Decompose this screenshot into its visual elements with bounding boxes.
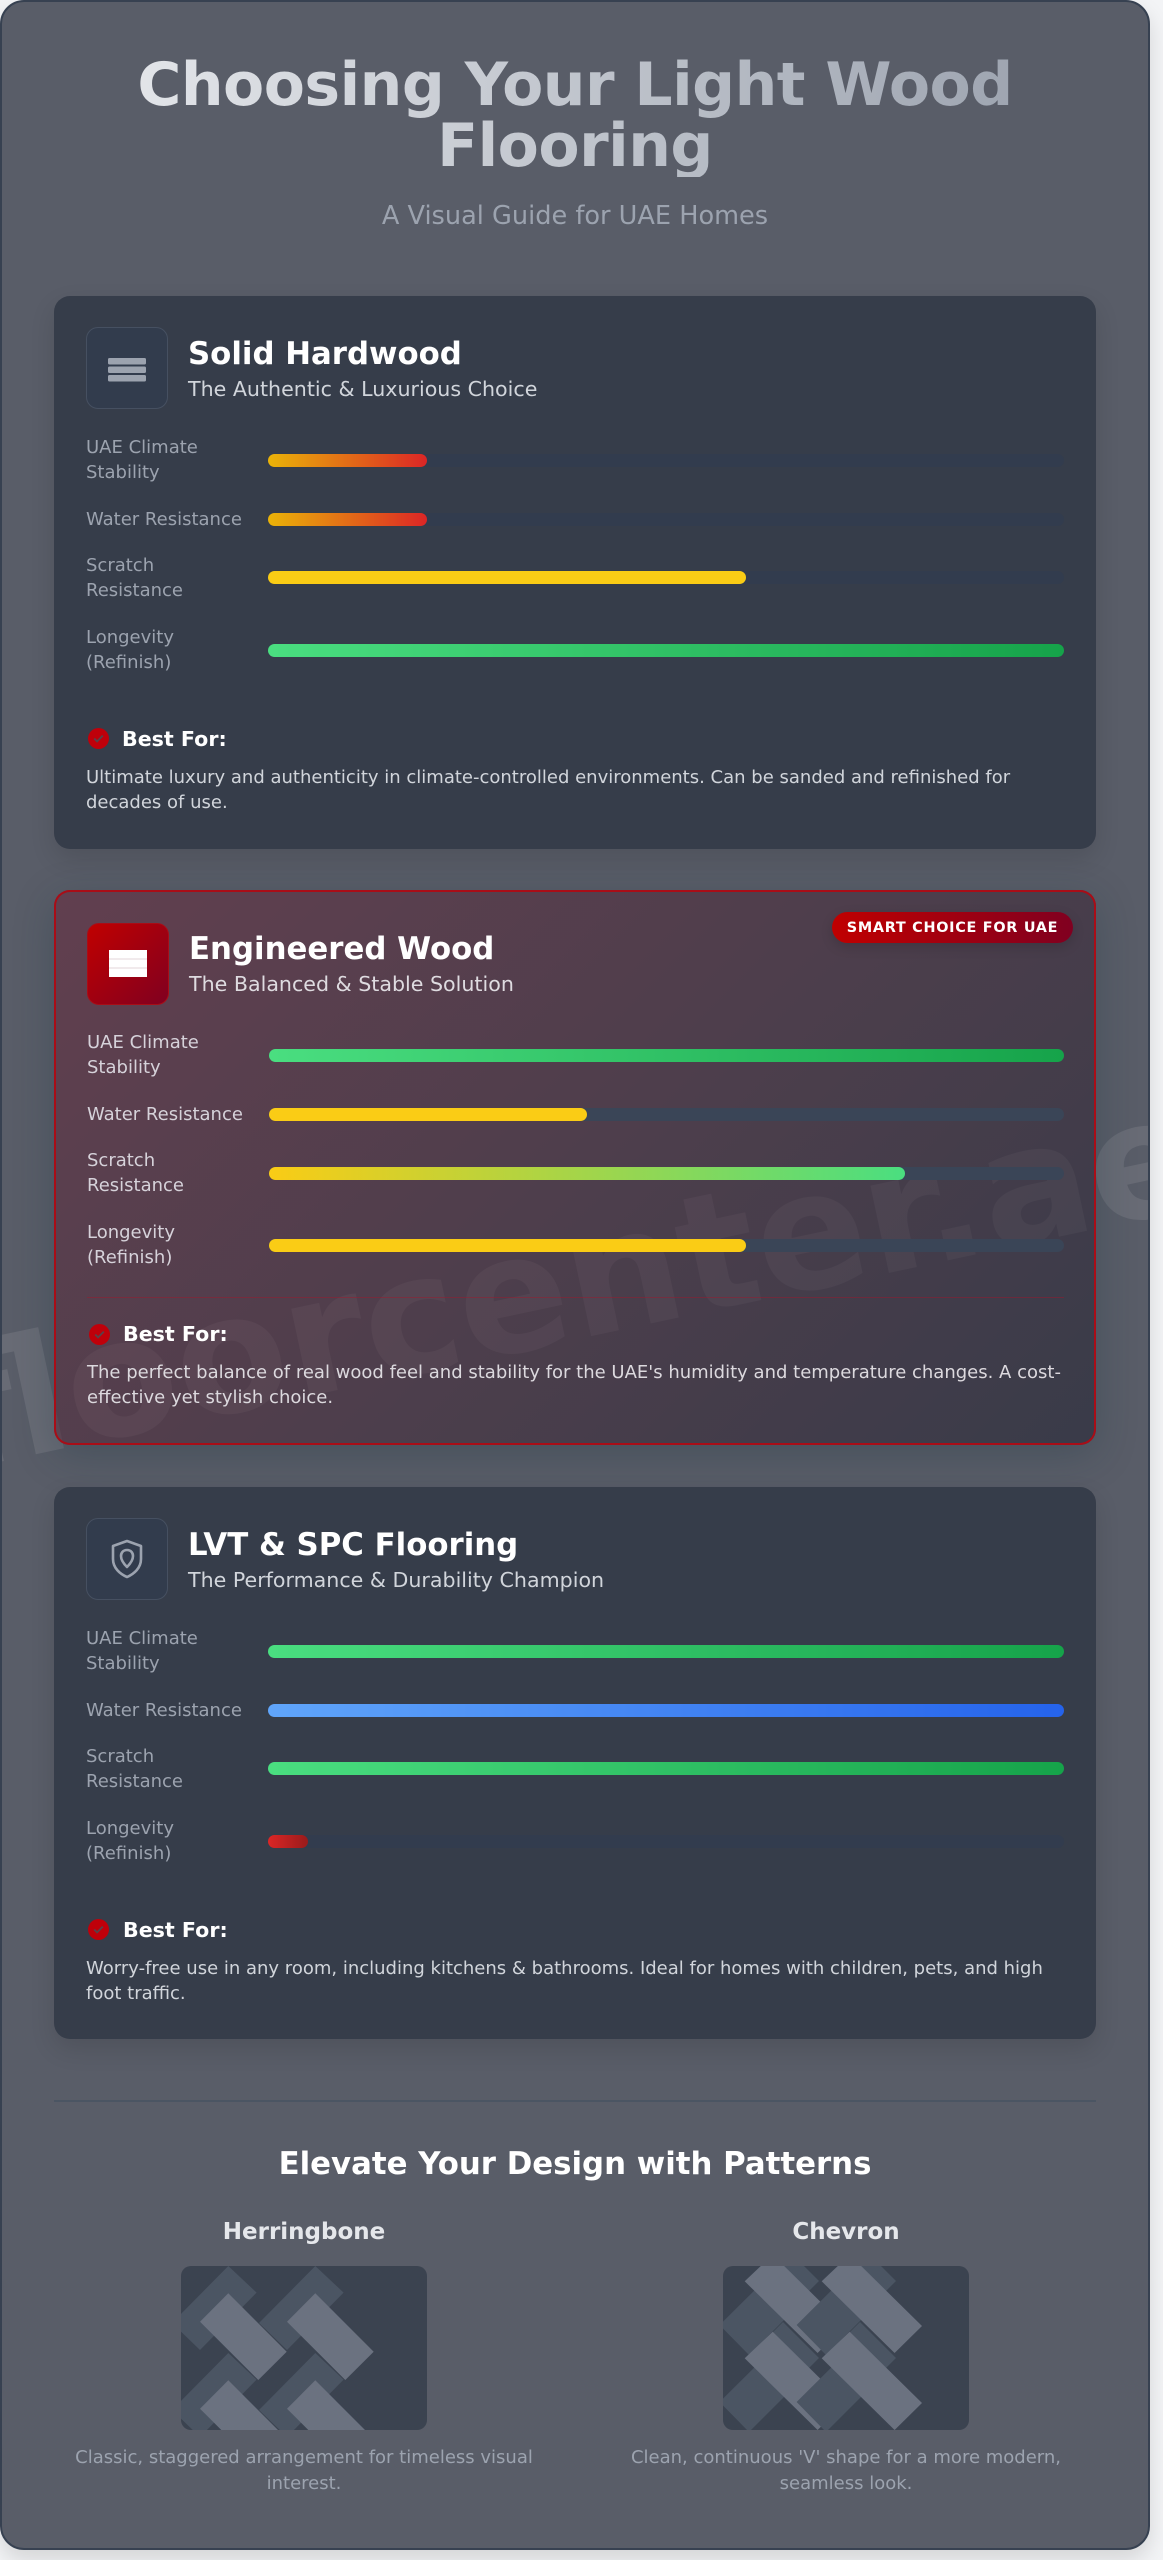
- rating: longevity: Longevity (Refinish): [86, 627, 174, 673]
- chevron swatch: [723, 2266, 969, 2430]
- rating: water resistance: Water Resistance: [87, 1104, 243, 1125]
- best for text: Ultimate luxury and authenticity in climate-controlled environments. Can be sanded and refinished for decades of use.: [86, 767, 1010, 813]
- icon: shield: [86, 1518, 168, 1600]
- rating: water resistance: Water Resistance: [86, 509, 242, 530]
- herringbone heading: Herringbone: [223, 2219, 385, 2245]
- tagline: The Balanced & Stable Solution: [189, 972, 514, 996]
- rating: longevity: [87, 1222, 1064, 1268]
- best for text: The perfect balance of real wood feel and stability for the UAE's humidity and temperature changes. A cost-effective yet stylish choice.: [87, 1362, 1061, 1408]
- pattern: chevron: [631, 2219, 1061, 2494]
- rating: longevity: [86, 1818, 308, 1864]
- herringbone caption: Classic, staggered arrangement for timeless visual interest.: [75, 2447, 533, 2494]
- best for heading: Best For:: [123, 1918, 228, 1942]
- panel: engineered wood: [54, 890, 1096, 1445]
- icon: stacked planks: [86, 327, 168, 409]
- tagline: The Performance & Durability Champion: [188, 1568, 604, 1592]
- rating: water resistance: [86, 1700, 1064, 1721]
- rating: water resistance: [87, 1104, 1064, 1125]
- tagline: The Authentic & Luxurious Choice: [188, 376, 537, 400]
- badge: [832, 912, 1073, 943]
- best for text: Worry-free use in any room, including kitchens & bathrooms. Ideal for homes with children, pets, and high foot traffic.: [86, 1958, 1043, 2004]
- rating: scratch resistance: [87, 1150, 1064, 1196]
- divider: [87, 1297, 1064, 1298]
- rating: longevity: [86, 627, 1064, 673]
- rating: scratch resistance: [86, 555, 746, 601]
- rating: UAE climate stability: [86, 437, 427, 483]
- chevron heading: Chevron: [792, 2219, 900, 2245]
- rating: UAE climate stability: [86, 1628, 1064, 1674]
- rating: longevity: Longevity (Refinish): [87, 1222, 175, 1268]
- panel: LVT and SPC: [54, 1487, 1096, 2039]
- rating: UAE climate stability: UAE Climate Stability: [86, 437, 198, 483]
- subtitle: A Visual Guide for UAE Homes: [382, 201, 768, 231]
- icon: check badge: [88, 1919, 109, 1940]
- rating: UAE climate stability: UAE Climate Stability: [87, 1032, 199, 1078]
- herringbone swatch: [181, 2266, 427, 2430]
- title: Choosing Your Light Wood Flooring: [137, 50, 1013, 181]
- rating: UAE climate stability: [87, 1032, 1064, 1078]
- heading: Solid Hardwood: [188, 336, 462, 372]
- rating: UAE climate stability: UAE Climate Stability: [86, 1628, 198, 1674]
- best for heading: Best For:: [122, 727, 227, 751]
- rating: scratch resistance: [86, 1746, 1064, 1792]
- icon: check badge: [89, 1324, 110, 1345]
- pattern: herringbone: [75, 2219, 533, 2494]
- chevron caption: Clean, continuous 'V' shape for a more modern, seamless look.: [631, 2447, 1061, 2494]
- rating: scratch resistance: Scratch Resistance: [87, 1150, 184, 1196]
- best for heading: Best For:: [123, 1322, 228, 1346]
- panel: solid hardwood: [54, 296, 1096, 849]
- icon: check badge: [88, 728, 109, 749]
- rating: longevity: Longevity (Refinish): [86, 1818, 174, 1864]
- icon: white planks: [87, 923, 169, 1005]
- rating: water resistance: Water Resistance: [86, 1700, 242, 1721]
- rating: scratch resistance: Scratch Resistance: [86, 555, 183, 601]
- patterns heading: Elevate Your Design with Patterns: [279, 2146, 871, 2182]
- heading: LVT & SPC Flooring: [188, 1526, 518, 1562]
- rating: scratch resistance: Scratch Resistance: [86, 1746, 183, 1792]
- rating: water resistance: [86, 509, 427, 530]
- badge: SMART CHOICE FOR UAE: [847, 920, 1058, 936]
- heading: Engineered Wood: [189, 930, 494, 966]
